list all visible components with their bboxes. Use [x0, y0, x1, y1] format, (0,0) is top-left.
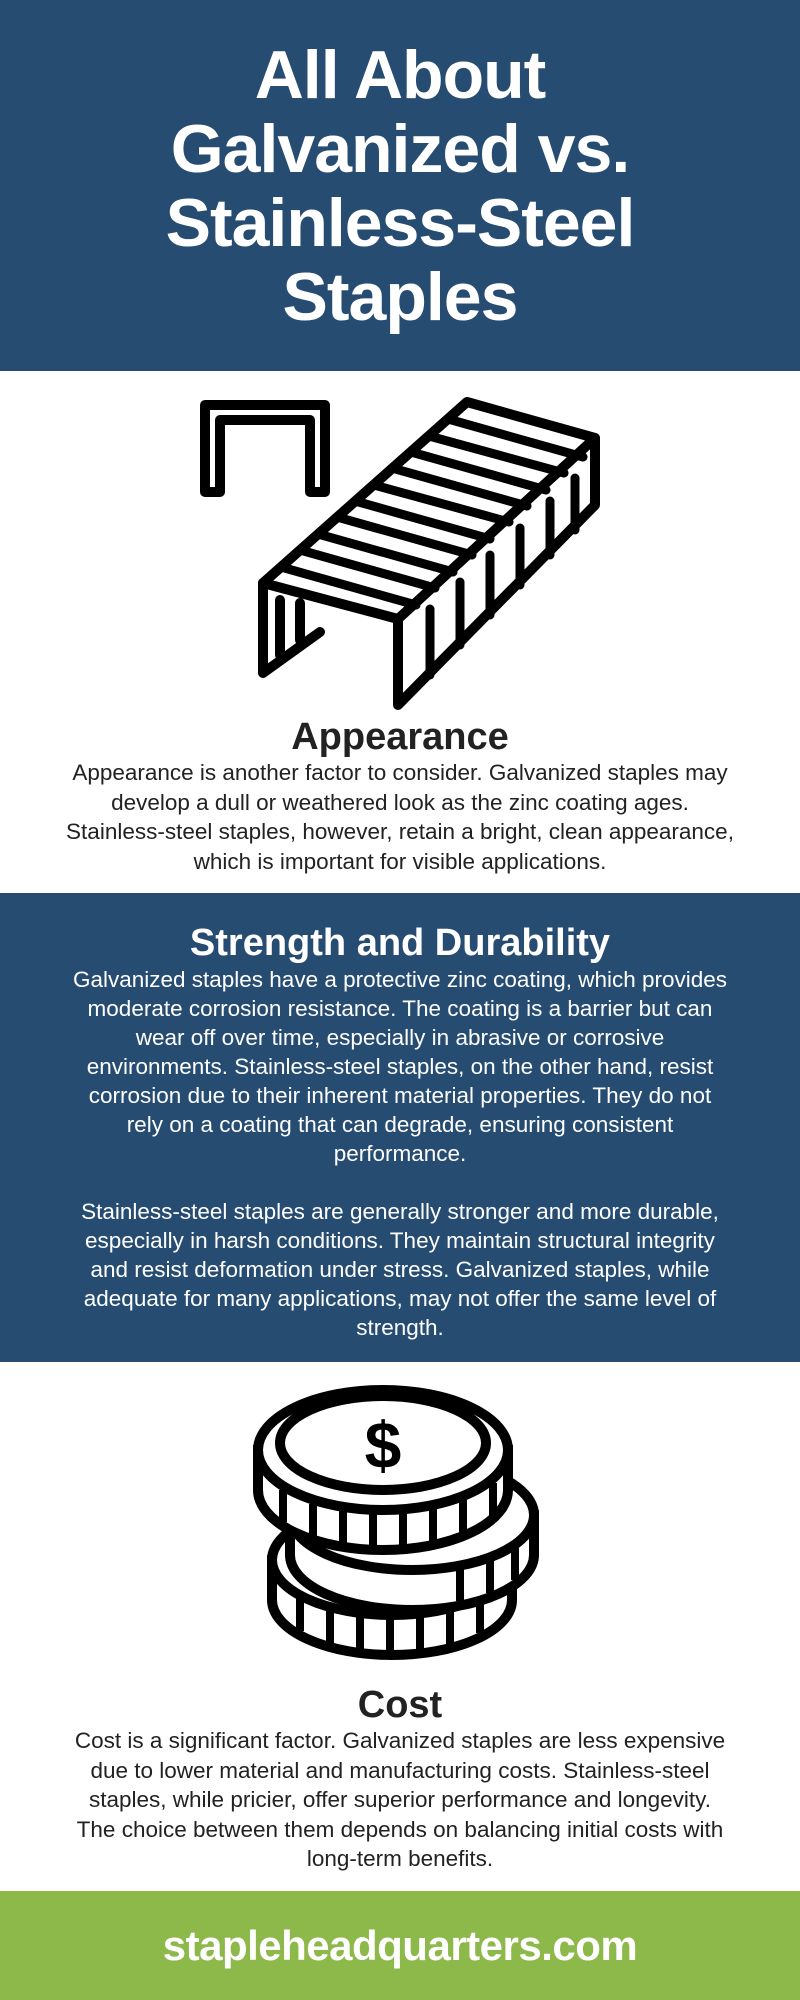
title: Staples	[283, 259, 517, 335]
header	[0, 0, 800, 371]
panel: strength	[0, 893, 800, 1362]
icon: coins	[253, 1385, 539, 1660]
heading: cost: Cost	[358, 1684, 442, 1726]
text: strength para 2: Stainless-steel staples are generally stronger and more durable, especially in harsh conditions. They maintain structural integrity and resist deformation under stress. Galvanized staples, while adequate for many applications, may not offer the same level of strength.	[81, 1199, 719, 1340]
text: cost: Cost is a significant factor. Galvanized staples are less expensive due to lower material and manufacturing costs. Stainless-steel staples, while pricier, offer superior performance and longevity. The choice between them depends on balancing initial costs with long-term benefits.	[75, 1728, 725, 1871]
footer url: stapleheadquarters.com	[163, 1922, 637, 1969]
panel: appearance	[0, 371, 800, 893]
text: appearance: Appearance is another factor to consider. Galvanized staples may develop a dull or weathered look as the zinc coating ages. Stainless-steel staples, however, retain a bright, clean appearance, which is important for visible applications.	[66, 760, 734, 874]
title: All About	[255, 37, 545, 113]
icon: dollar sign: $	[365, 1408, 401, 1482]
title: Stainless-Steel	[166, 185, 634, 261]
footer	[0, 1891, 800, 2000]
heading: strength: Strength and Durability	[190, 922, 610, 964]
icon: staples	[200, 397, 600, 710]
title: Galvanized vs.	[171, 111, 629, 187]
text: strength para 1: Galvanized staples have a protective zinc coating, which provides moderate corrosion resistance. The coating is a barrier but can wear off over time, especially in abrasive or corrosive environments. Stainless-steel staples, on the other hand, resist corrosion due to their inherent material properties. They do not rely on a coating that can degrade, ensuring consistent performance.	[73, 967, 727, 1166]
heading: appearance: Appearance	[291, 716, 509, 758]
title	[166, 37, 634, 335]
panel: cost	[0, 1362, 800, 1891]
